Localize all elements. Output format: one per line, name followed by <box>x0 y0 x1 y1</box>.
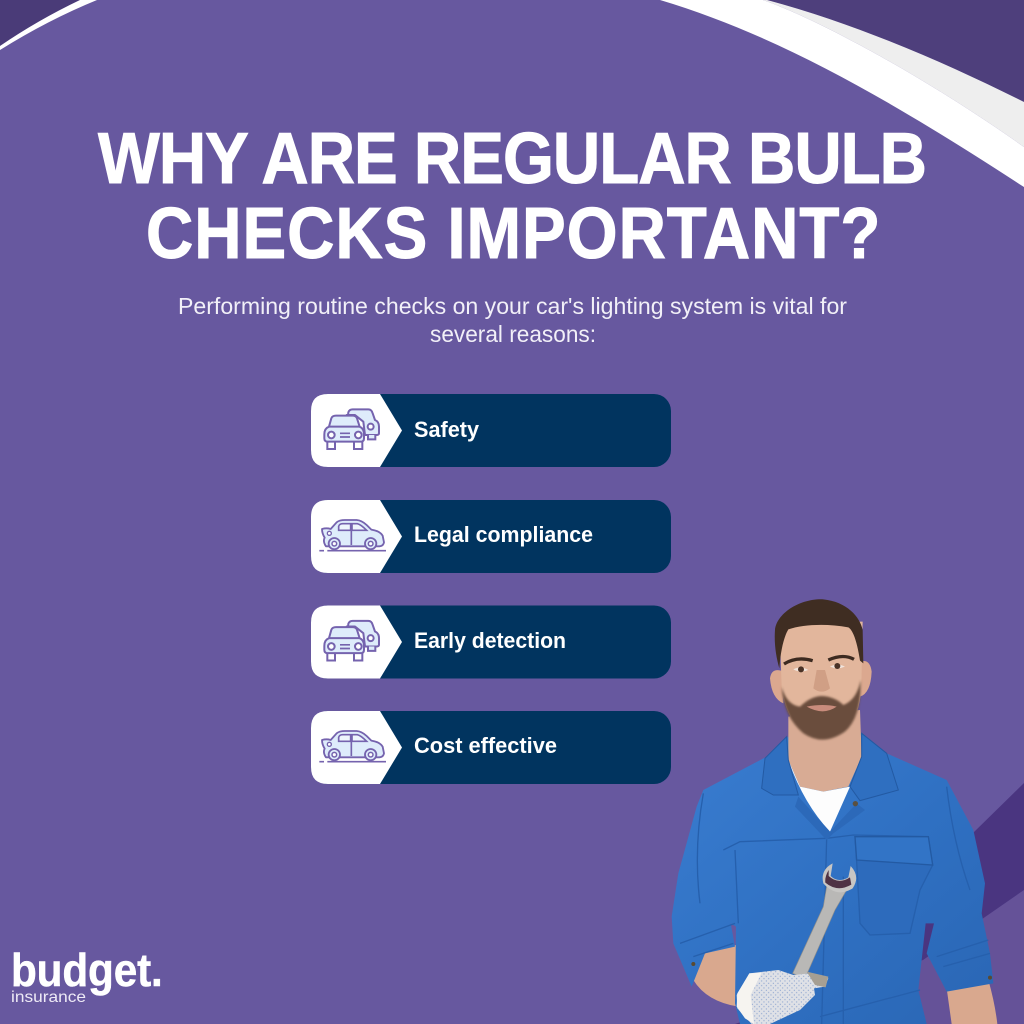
hair <box>775 599 863 668</box>
icon: two cars <box>324 409 379 449</box>
neck <box>788 710 862 792</box>
overalls <box>672 733 993 1024</box>
glove fingertip <box>807 972 828 987</box>
intro text <box>178 293 847 347</box>
intro text: Performing routine checks on your car's lighting system is vital for <box>178 293 847 319</box>
overall shading <box>680 787 990 1024</box>
collar <box>762 733 898 801</box>
beard <box>782 680 861 740</box>
wrench jaw <box>823 863 856 892</box>
label: Legal compliance: Legal compliance <box>414 522 593 547</box>
label: Cost effective: Cost effective <box>414 733 557 758</box>
corner swoosh: top right <box>660 0 1024 187</box>
logo: budget. <box>11 945 163 996</box>
ears <box>770 661 872 703</box>
diagonal band behind mechanic <box>735 783 1024 1024</box>
icon: two cars <box>324 621 379 660</box>
chest pocket <box>855 837 933 935</box>
list item: Cost effective <box>311 711 671 784</box>
corner swoosh: top left <box>0 0 97 50</box>
intro text: several reasons: <box>430 321 596 347</box>
face <box>779 622 863 739</box>
label: Safety: Safety <box>414 417 480 442</box>
label: Early detection: Early detection <box>414 628 566 653</box>
lower right tint <box>740 890 1024 1024</box>
glove cuff <box>737 973 762 1024</box>
cuff buttons <box>691 962 992 980</box>
title <box>98 118 927 274</box>
icon: sedan car <box>319 731 386 762</box>
forearms <box>693 945 997 1024</box>
list item: Legal compliance <box>311 500 671 573</box>
list item: Safety <box>311 394 671 467</box>
title: WHY ARE REGULAR BULB <box>98 118 927 199</box>
title: CHECKS IMPORTANT? <box>146 193 880 274</box>
logo: insurance <box>11 989 86 1006</box>
glove <box>737 970 828 1024</box>
nose <box>813 670 830 692</box>
brows and eyes <box>784 656 854 664</box>
mechanic illustration <box>672 599 997 1024</box>
mouth <box>807 705 837 711</box>
t-shirt <box>788 760 850 832</box>
list item: Early detection <box>311 606 671 678</box>
icon: sedan car <box>319 520 386 551</box>
wrench <box>793 887 847 978</box>
